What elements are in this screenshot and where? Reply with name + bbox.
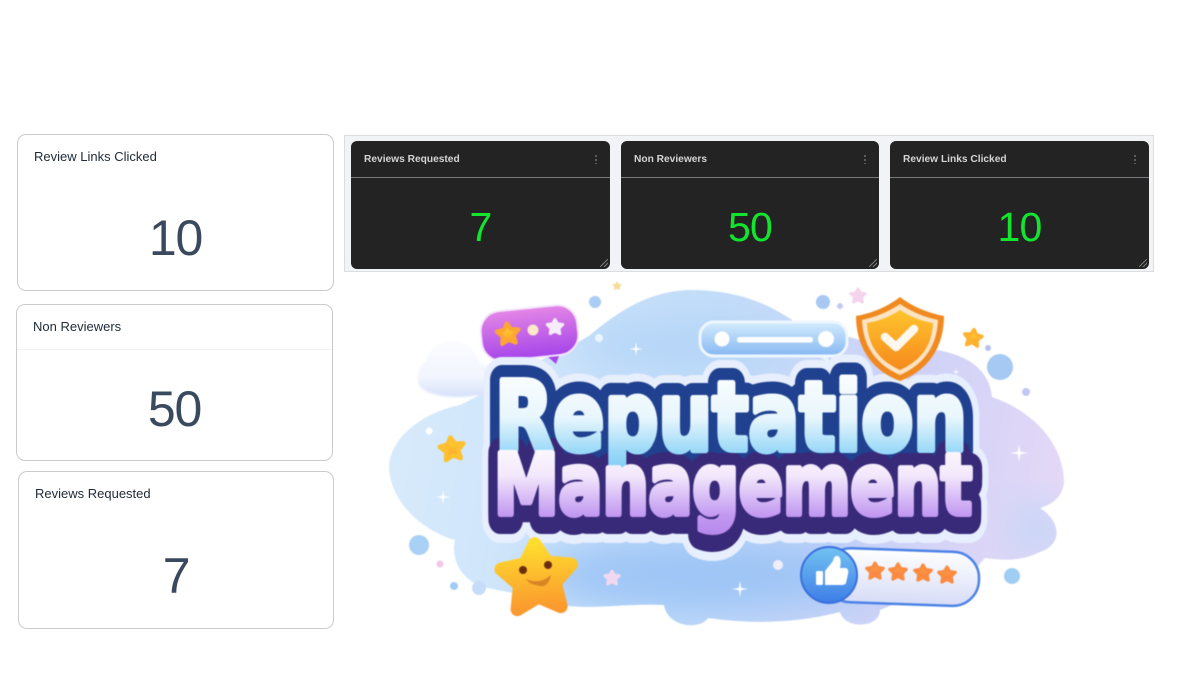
title plate: dark outline <box>490 363 974 539</box>
icon: gold star left <box>439 436 465 461</box>
icon: shield with check <box>856 297 944 381</box>
dark card: reviews requested: 7 <box>469 204 492 250</box>
dark card: non reviewers: Non Reviewers <box>634 154 707 165</box>
small white cloud <box>418 341 498 397</box>
dark card: non reviewers <box>621 141 879 269</box>
word: Management: Management <box>494 436 972 534</box>
rating pill with thumbs up <box>801 547 980 607</box>
title plate: pale outline: Management <box>494 436 972 534</box>
card: reviews requested: 7 <box>163 548 189 604</box>
title plate: pale outline: Reputation <box>495 363 967 473</box>
icon: blue chat pill <box>700 322 847 364</box>
title plate: dark outline: Management <box>494 436 972 534</box>
card: review links clicked: Review Links Clicked <box>34 149 157 164</box>
dark card: reviews requested <box>351 141 610 269</box>
card: review links clicked <box>17 134 334 291</box>
icon: smiling star <box>500 542 574 610</box>
card: non reviewers <box>16 304 333 461</box>
dark card: review links clicked <box>890 141 1149 269</box>
floating dots and sparkles <box>409 282 1030 597</box>
icon: gold star right <box>963 328 983 347</box>
card: reviews requested: Reviews Requested <box>35 486 151 501</box>
card: reviews requested <box>18 471 334 629</box>
illustration: reputation management badge <box>388 281 1064 626</box>
title plate: pale outline: Management <box>494 442 972 540</box>
icon: thumbs up <box>801 547 857 603</box>
title plate: pale outline <box>494 363 972 540</box>
card: non reviewers: Non Reviewers <box>33 319 121 334</box>
dark card: review links clicked: Review Links Clicked <box>903 154 1007 165</box>
word: Reputation: Reputation <box>495 363 967 473</box>
dark card: reviews requested: Reviews Requested <box>364 154 460 165</box>
dark card: review links clicked: 10 <box>997 204 1042 250</box>
cloud background <box>380 285 1080 630</box>
title plate: dark outline: Reputation <box>495 363 967 473</box>
panel: dark dashboard strip <box>344 135 1154 272</box>
icon: purple speech bubble <box>479 303 580 364</box>
card: review links clicked: 10 <box>149 210 202 266</box>
title: Reputation Management <box>490 363 974 540</box>
title plate: dark outline: Management <box>494 441 972 539</box>
card: non reviewers: 50 <box>148 381 201 437</box>
dark card: non reviewers: 50 <box>728 204 772 250</box>
rating stars <box>867 563 955 582</box>
